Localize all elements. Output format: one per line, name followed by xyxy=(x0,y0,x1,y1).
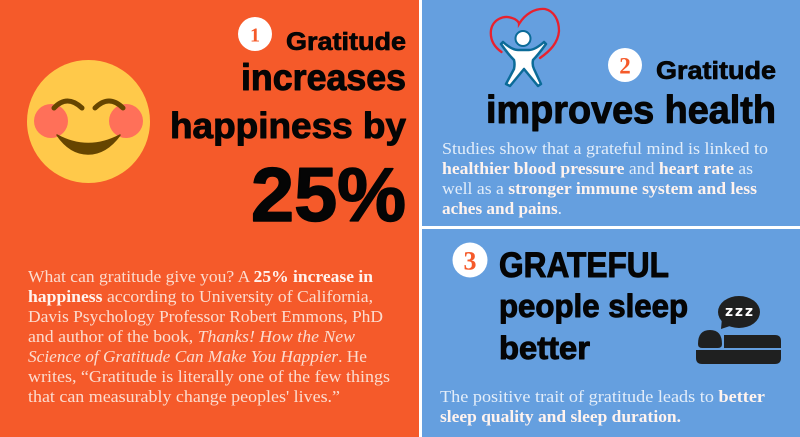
icon: sleeping in bed xyxy=(696,296,781,364)
text block: health explanation: well as a stronger immune system and less xyxy=(442,179,758,198)
number badge 1: 1 xyxy=(250,24,260,46)
number badge 3: 3 xyxy=(464,246,476,276)
heading: grateful people sleep better xyxy=(499,246,688,366)
panel: gratitude increases happiness xyxy=(0,0,419,437)
heading: grateful people sleep better: GRATEFUL xyxy=(499,246,669,285)
heading: gratitude increases happiness by 25% xyxy=(170,28,406,238)
text block: health explanation xyxy=(442,139,768,218)
heading: gratitude improves health: Gratitude xyxy=(656,57,776,85)
heading: gratitude improves health xyxy=(486,57,776,132)
panel: gratitude improves health xyxy=(422,0,800,226)
heading: gratitude increases happiness by 25%: happiness by xyxy=(170,105,406,146)
text block: sleep explanation: sleep quality and sleep duration. xyxy=(440,407,681,426)
number badge 2 xyxy=(608,48,642,82)
heading: gratitude increases happiness by 25%: Gratitude xyxy=(286,28,406,56)
text block: happiness explanation: Davis Psychology Professor Robert Emmons, PhD xyxy=(28,307,383,326)
icon: sleeping in bed: zzz xyxy=(725,304,753,320)
text block: happiness explanation: What can gratitude give you? A 25% increase in xyxy=(28,267,373,286)
icon: smiling emoji xyxy=(27,60,150,183)
text block: sleep explanation xyxy=(440,387,765,426)
number badge 3 xyxy=(452,242,488,278)
text block: health explanation: Studies show that a grateful mind is linked to xyxy=(442,139,768,158)
heading: gratitude increases happiness by 25%: increases xyxy=(241,57,406,98)
heading: grateful people sleep better: people sleep xyxy=(499,288,688,324)
text block: happiness explanation: Science of Gratitude Can Make You Happier . He xyxy=(28,347,367,366)
text block: health explanation: aches and pains . xyxy=(442,199,562,218)
heading: gratitude improves health: improves health xyxy=(486,89,776,132)
text block: happiness explanation: writes, “Gratitude is literally one of the few things xyxy=(28,367,390,386)
text block: happiness explanation: that can measurably change peoples' lives.” xyxy=(28,387,340,406)
text block: health explanation: healthier blood pressure and heart rate as xyxy=(442,159,753,178)
text block: sleep explanation: The positive trait of gratitude leads to better xyxy=(440,387,765,406)
heading: grateful people sleep better: better xyxy=(499,330,590,366)
number badge 1 xyxy=(238,17,272,51)
panel: grateful people sleep better xyxy=(422,229,800,437)
text block: happiness explanation: happiness according to University of California, xyxy=(28,287,373,306)
number badge 2: 2 xyxy=(619,54,631,78)
text block: happiness explanation: and author of the book, Thanks! How the New xyxy=(28,327,355,346)
text block: happiness explanation xyxy=(28,267,390,406)
icon: person in heart xyxy=(491,9,559,86)
heading: gratitude increases happiness by 25%: 25% xyxy=(251,153,406,238)
